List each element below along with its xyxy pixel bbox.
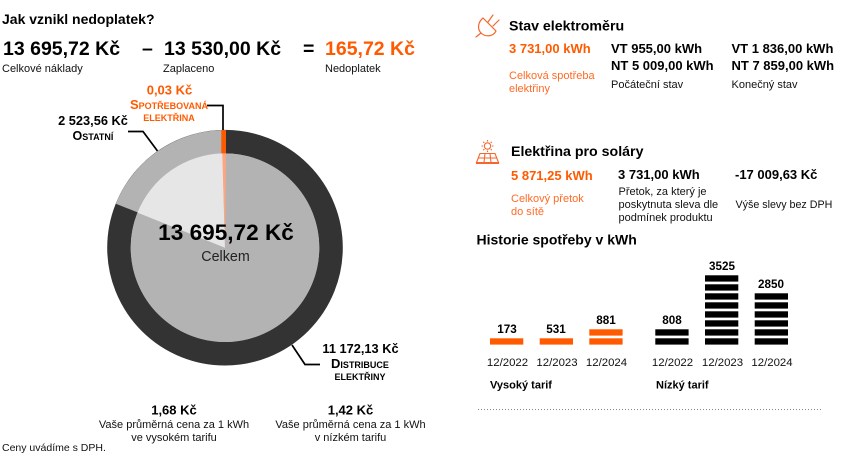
panel: meter state — [476, 15, 834, 95]
callout: other: Ostatní — [73, 129, 114, 143]
discounted overflow: podmínek produktu — [618, 212, 713, 224]
callout: other: 2 523,56 Kč — [58, 113, 128, 128]
total consumption — [509, 41, 595, 95]
bar: 12/2022: 173 — [497, 323, 517, 336]
overpayment — [325, 38, 415, 75]
average price low tariff: Vaše průměrná cena za 1 kWh — [275, 419, 426, 431]
bar chart: low tariff — [652, 260, 793, 392]
total consumption: 3 731,00 kWh — [509, 41, 591, 56]
discounted overflow: 3 731,00 kWh — [618, 167, 700, 182]
initial state — [611, 41, 714, 91]
total consumption: elektřiny — [509, 83, 550, 95]
final state — [732, 41, 834, 91]
bar: 12/2024: 12/2024 — [586, 357, 627, 369]
icon: solar panel — [476, 140, 498, 164]
overpayment: Nedoplatek — [325, 63, 381, 75]
final state: NT 7 859,00 kWh — [732, 58, 834, 73]
heading: solar electricity: Elektřina pro soláry — [511, 144, 644, 160]
bar: 12/2023 — [702, 260, 743, 369]
bar: 12/2024 — [751, 278, 793, 369]
axis label: low tariff: Nízký tarif — [656, 380, 709, 392]
bar: 12/2022 — [487, 323, 528, 369]
minus sign: – — [142, 38, 153, 60]
bar: 12/2022 — [652, 314, 693, 369]
total overflow — [511, 168, 593, 218]
average price high tariff: ve vysokém tarifu — [131, 432, 217, 444]
discount amount — [735, 167, 832, 211]
icon: plug — [476, 15, 499, 37]
callout: distribution — [292, 341, 399, 383]
axis label: high tariff: Vysoký tarif — [490, 380, 552, 392]
bar chart: high tariff — [487, 314, 627, 392]
discounted overflow: poskytnuta sleva dle — [618, 199, 718, 211]
callout: consumed electricity: 0,03 Kč — [147, 82, 192, 98]
total costs: 13 695,72 Kč — [3, 38, 120, 60]
initial state: VT 955,00 kWh — [611, 41, 702, 56]
total overflow: do sítě — [511, 206, 544, 218]
final state: Konečný stav — [732, 79, 798, 91]
average price low tariff — [275, 402, 426, 444]
callout: consumed electricity: Spotřebovaná — [130, 97, 209, 112]
bar: 12/2024 — [586, 314, 627, 369]
discount amount: Výše slevy bez DPH — [736, 199, 832, 211]
initial state: Počáteční stav — [611, 79, 684, 91]
callout: distribution: Distribuce — [331, 356, 389, 371]
bar: 12/2022: 12/2022 — [487, 357, 528, 369]
discounted overflow — [618, 167, 718, 224]
inner slice: other — [138, 153, 225, 248]
donut center total: Celkem — [201, 249, 250, 265]
equals sign: = — [303, 38, 314, 60]
discounted overflow: Přetok, za který je — [618, 186, 707, 198]
donut center total: 13 695,72 Kč — [158, 220, 294, 245]
segment: consumed electricity — [221, 130, 226, 153]
inner pie — [131, 153, 319, 342]
bar: 12/2023: 3525 — [709, 260, 735, 273]
final state: VT 1 836,00 kWh — [732, 41, 833, 56]
bar: 12/2023 — [536, 323, 578, 369]
callout: consumed electricity — [130, 82, 223, 130]
footnote: Ceny uvádíme s DPH. — [2, 442, 106, 454]
total costs — [2, 38, 120, 75]
donut chart — [116, 130, 331, 354]
callout: distribution: elektřiny — [334, 368, 386, 383]
heading: meter state: Stav elektroměru — [509, 18, 624, 34]
callout: other — [58, 113, 158, 151]
paid: Zaplaceno — [163, 63, 214, 75]
total consumption: Celková spotřeba — [509, 70, 595, 82]
average price low tariff: 1,42 Kč — [328, 402, 373, 418]
bar: 12/2023: 531 — [546, 323, 566, 336]
callout: consumed electricity: elektřina — [143, 109, 195, 124]
average price high tariff: Vaše průměrná cena za 1 kWh — [99, 419, 249, 431]
bar: 12/2023: 12/2023 — [536, 357, 578, 369]
total overflow: 5 871,25 kWh — [511, 168, 593, 183]
bar: 12/2024: 881 — [596, 314, 616, 327]
segment: other — [116, 130, 222, 213]
bar: 12/2022: 808 — [662, 314, 682, 327]
total overflow: Celkový přetok — [511, 193, 584, 205]
average price high tariff: 1,68 Kč — [151, 402, 197, 418]
heading: consumption history: Historie spotřeby v kWh — [476, 232, 637, 248]
total costs: Celkové náklady — [2, 63, 83, 75]
callout: distribution: 11 172,13 Kč — [322, 341, 399, 356]
bar: 12/2023: 12/2023 — [702, 357, 743, 369]
heading: Jak vznikl nedoplatek: Jak vznikl nedoplatek? — [2, 11, 154, 27]
donut center total — [158, 220, 294, 265]
paid — [163, 38, 281, 75]
panel: solar electricity — [476, 140, 832, 224]
average price low tariff: v nízkém tarifu — [315, 432, 386, 444]
overpayment: 165,72 Kč — [325, 38, 415, 60]
bar: 12/2022: 12/2022 — [652, 357, 693, 369]
discount amount: -17 009,63 Kč — [735, 167, 817, 182]
paid: 13 530,00 Kč — [164, 38, 281, 60]
bar: 12/2024: 2850 — [758, 278, 784, 291]
average price high tariff — [99, 402, 249, 444]
initial state: NT 5 009,00 kWh — [611, 58, 714, 73]
inner slice: consumed electricity — [222, 153, 226, 248]
bar: 12/2024: 12/2024 — [751, 357, 793, 369]
equation: overpayment calculation — [2, 38, 415, 75]
